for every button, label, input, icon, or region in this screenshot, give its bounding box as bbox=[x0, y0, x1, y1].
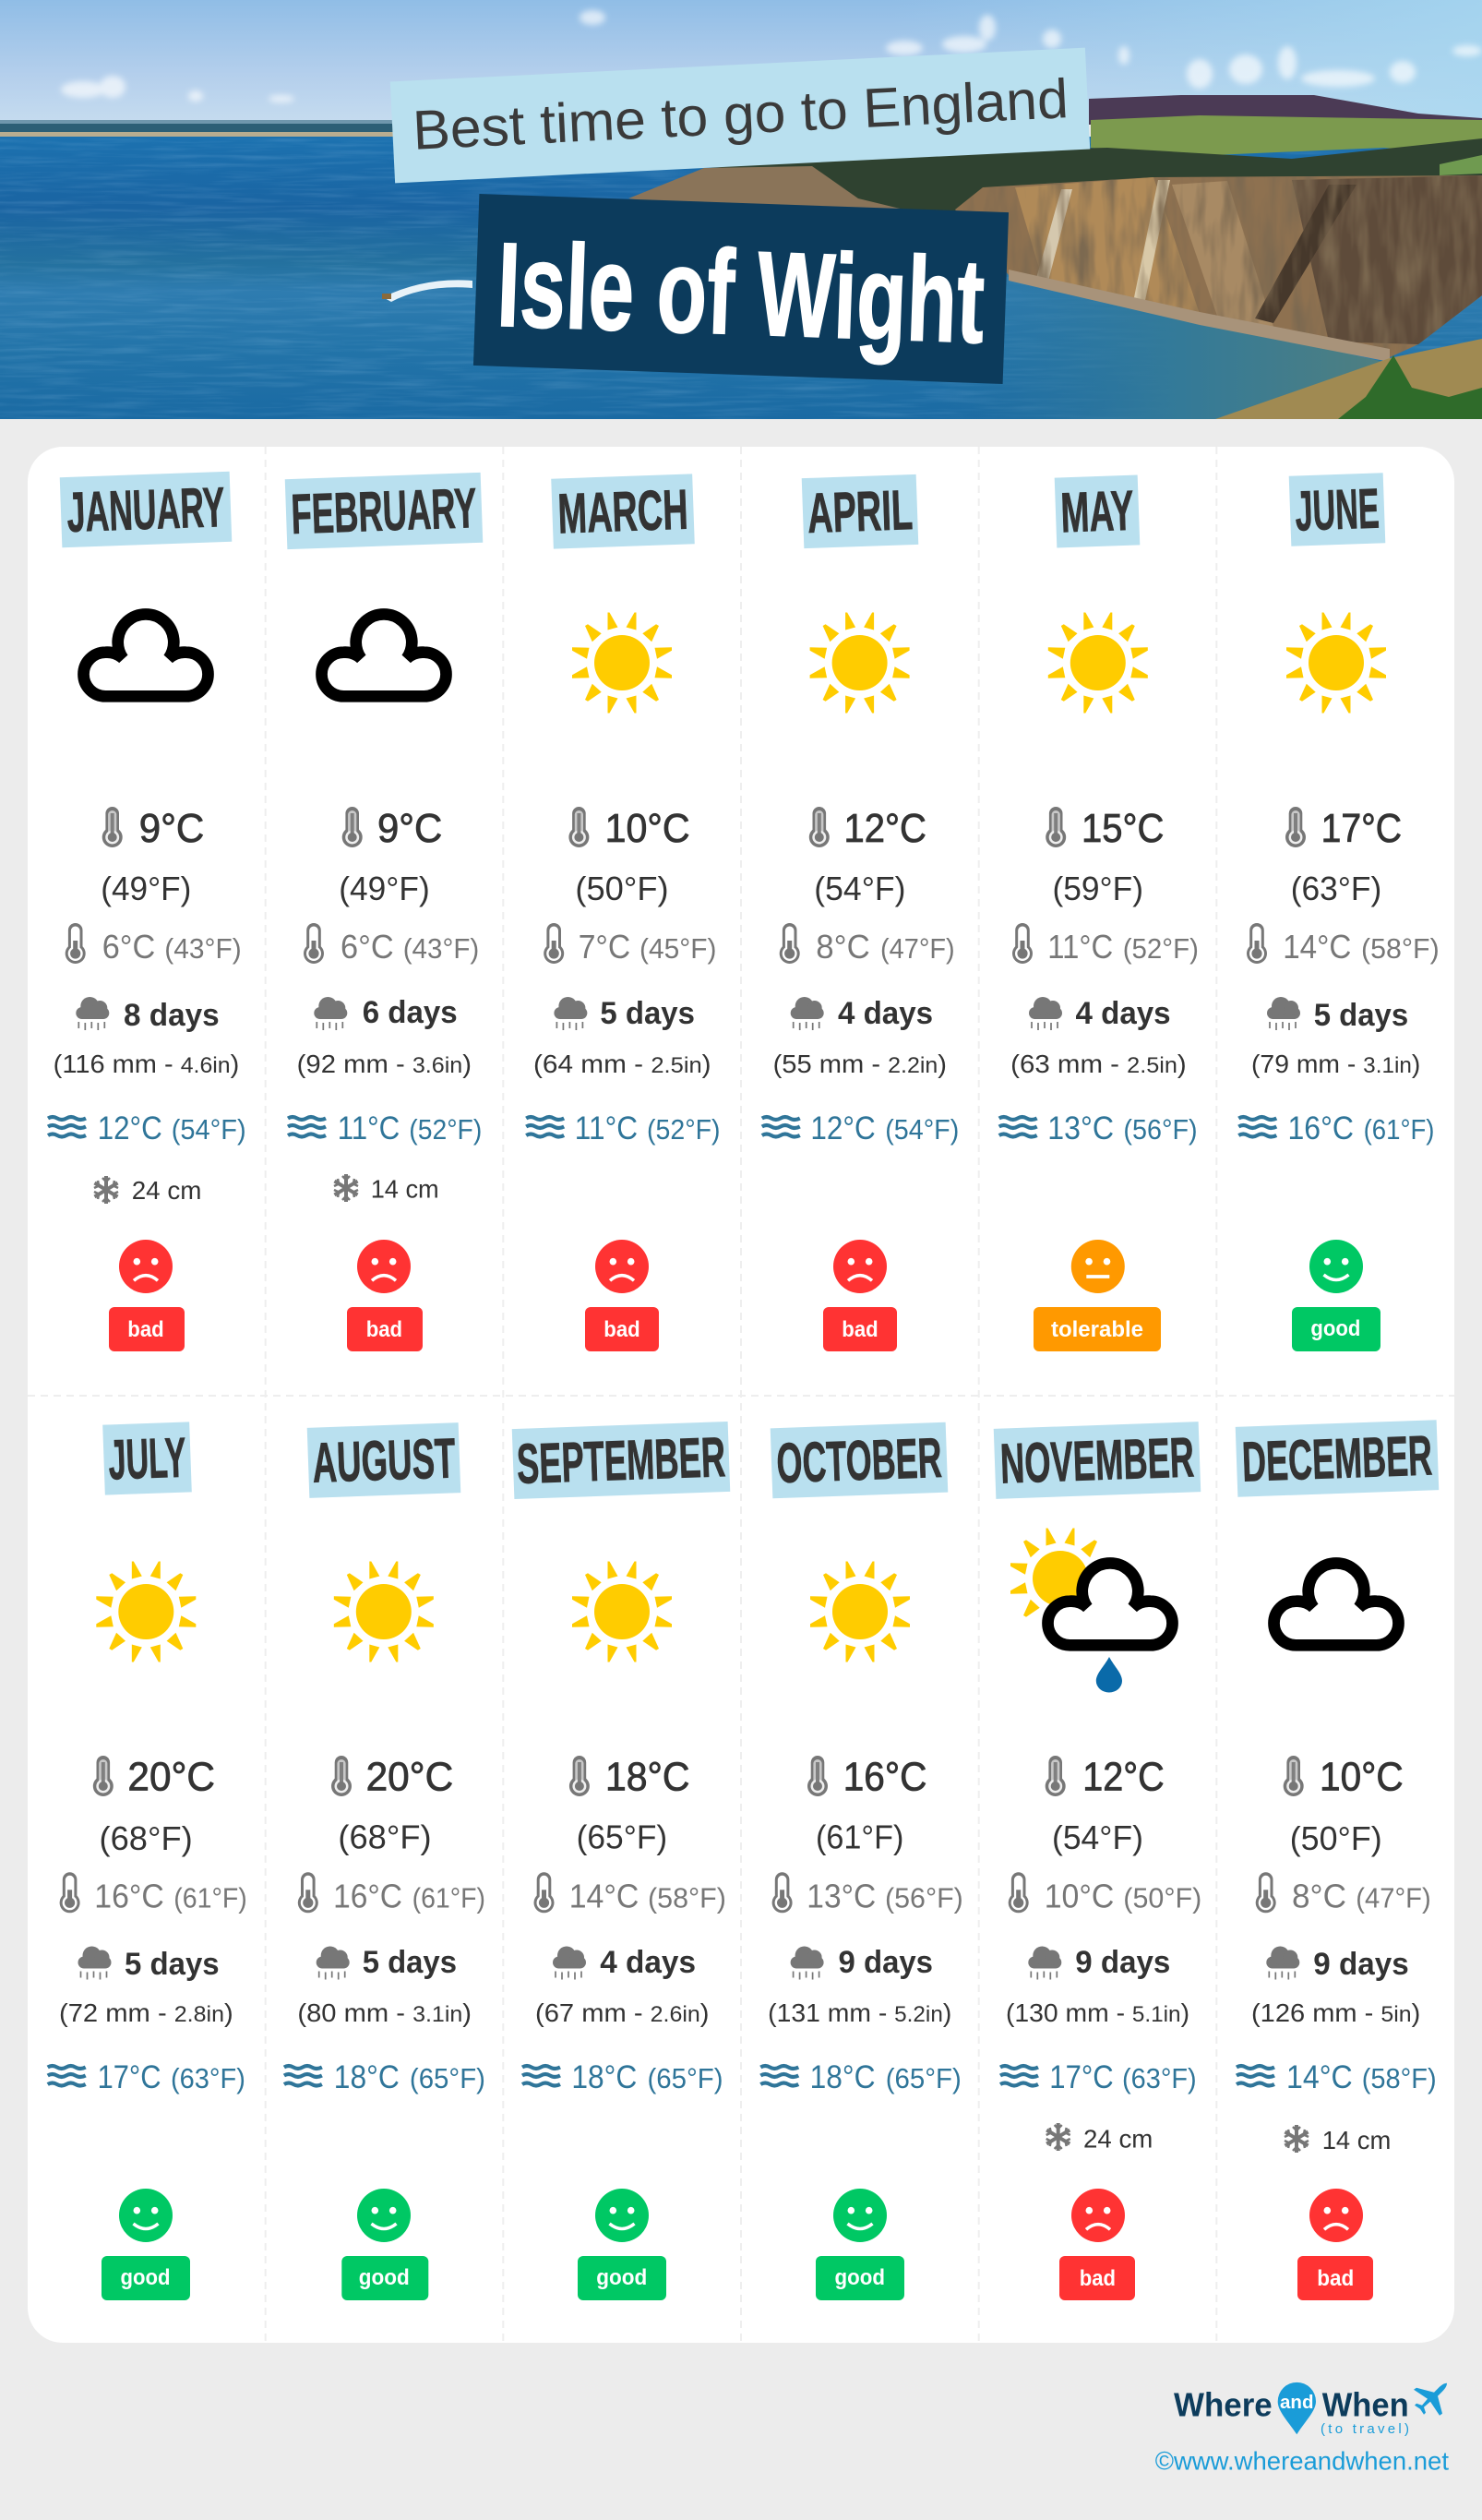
sea temperature: 18°C bbox=[334, 2059, 400, 2095]
sea temperature bbox=[1238, 1110, 1434, 1146]
rainfall bbox=[1251, 997, 1420, 1078]
logo: Where and When bbox=[1174, 2382, 1447, 2437]
sea temperature: (54°F) bbox=[172, 1113, 246, 1146]
low temperature: (58°F) bbox=[1361, 932, 1440, 965]
title: Isle of Wight: Isle of Wight bbox=[495, 217, 986, 368]
month label: February bbox=[285, 473, 483, 549]
rainfall: (130 mm - 5.1in) bbox=[1006, 1998, 1189, 2027]
low temperature: (61°F) bbox=[173, 1881, 247, 1914]
sea temperature: (61°F) bbox=[1364, 1113, 1434, 1146]
month label: September bbox=[512, 1422, 730, 1499]
sea temperature bbox=[522, 2059, 723, 2095]
high temperature: 9°C bbox=[139, 806, 204, 851]
high temperature: (68°F) bbox=[338, 1818, 432, 1855]
credit: website: ©www.whereandwhen.net bbox=[1155, 2447, 1449, 2476]
high temperature bbox=[339, 806, 442, 907]
sea temperature bbox=[526, 1110, 720, 1146]
icon: sun bbox=[572, 613, 672, 713]
sea temperature: (65°F) bbox=[648, 2062, 723, 2094]
rating: good: good bbox=[120, 2265, 170, 2290]
low temperature: (61°F) bbox=[412, 1881, 485, 1914]
month label: May: MAY bbox=[1059, 479, 1135, 544]
rating: good bbox=[102, 2189, 190, 2300]
low temperature: (43°F) bbox=[164, 932, 242, 965]
logo: Where and When: (to travel) bbox=[1321, 2421, 1409, 2437]
low temperature: 16°C bbox=[333, 1878, 402, 1914]
rainfall: 5 days bbox=[125, 1947, 220, 1982]
month label: June: JUNE bbox=[1294, 476, 1380, 543]
rainfall: (80 mm - 3.1in) bbox=[297, 1998, 472, 2027]
high temperature: (49°F) bbox=[101, 870, 191, 907]
sea temperature: (65°F) bbox=[886, 2062, 962, 2094]
rainfall bbox=[1010, 996, 1187, 1078]
low temperature: 13°C bbox=[807, 1878, 876, 1914]
low temperature: 10°C bbox=[1045, 1878, 1114, 1914]
icon: sun bbox=[1286, 613, 1386, 713]
rating: bad bbox=[1059, 2189, 1135, 2300]
icon: cloud bbox=[84, 614, 208, 696]
sea temperature: (52°F) bbox=[647, 1113, 720, 1146]
rating: good bbox=[341, 2189, 428, 2300]
icon: map pin bbox=[1278, 2382, 1316, 2434]
sea temperature bbox=[1237, 2059, 1437, 2095]
low temperature: (45°F) bbox=[639, 932, 716, 965]
low temperature bbox=[780, 923, 955, 966]
panel: January bbox=[48, 472, 246, 1351]
snowfall bbox=[1285, 2125, 1391, 2154]
rating: bad bbox=[823, 1240, 897, 1351]
panel: August bbox=[284, 1422, 485, 2300]
month label: July: JULY bbox=[107, 1426, 187, 1491]
rainfall: (79 mm - 3.1in) bbox=[1251, 1050, 1420, 1078]
rainfall bbox=[54, 997, 239, 1078]
rating: bad bbox=[347, 1240, 423, 1351]
high temperature: (50°F) bbox=[1290, 1819, 1382, 1857]
panel: December bbox=[1236, 1420, 1439, 2300]
sea temperature: (58°F) bbox=[1362, 2062, 1437, 2094]
icon: sun bbox=[96, 1562, 196, 1662]
low temperature: (43°F) bbox=[403, 932, 479, 965]
high temperature: (54°F) bbox=[814, 870, 906, 907]
month label: May bbox=[1055, 474, 1140, 548]
high temperature bbox=[1284, 1754, 1404, 1857]
rating: tolerable: tolerable bbox=[1051, 1317, 1143, 1342]
rainfall: 5 days bbox=[600, 996, 695, 1031]
rainfall: 8 days bbox=[124, 998, 220, 1033]
rainfall: (67 mm - 2.6in) bbox=[535, 1998, 709, 2027]
sea temperature bbox=[284, 2059, 485, 2095]
high temperature: 17°C bbox=[1321, 806, 1402, 851]
low temperature bbox=[544, 923, 716, 966]
rainfall: 6 days bbox=[363, 995, 458, 1030]
high temperature bbox=[1046, 806, 1164, 907]
title: Isle of Wight bbox=[473, 194, 1009, 384]
rating: good: good bbox=[1310, 1316, 1360, 1341]
snowfall: 24 cm bbox=[132, 1176, 201, 1205]
high temperature bbox=[569, 1754, 690, 1855]
low temperature: 6°C bbox=[341, 928, 394, 966]
month label: September: SEPTEMBER bbox=[516, 1425, 726, 1495]
rating: bad: bad bbox=[604, 1317, 640, 1342]
banner: subtitle: Best time to go to England bbox=[412, 67, 1070, 162]
rainfall bbox=[1251, 1946, 1420, 2027]
panel: September bbox=[512, 1422, 730, 2300]
sea temperature: 17°C bbox=[1049, 2059, 1114, 2095]
rainfall: (126 mm - 5in) bbox=[1251, 1998, 1420, 2027]
snowfall: 14 cm bbox=[371, 1174, 439, 1204]
high temperature bbox=[101, 806, 204, 907]
sea temperature bbox=[999, 1110, 1198, 1146]
month label: November: NOVEMBER bbox=[999, 1425, 1195, 1495]
rating: good: good bbox=[834, 2265, 885, 2290]
icon: cloud bbox=[322, 614, 446, 696]
icon: sun, cloud and rain drop bbox=[1010, 1529, 1172, 1692]
high temperature: (50°F) bbox=[575, 870, 669, 907]
low temperature bbox=[304, 923, 479, 966]
snowfall bbox=[334, 1174, 439, 1204]
sea temperature bbox=[762, 1110, 959, 1146]
sea temperature: 13°C bbox=[1047, 1110, 1114, 1146]
sea temperature: (56°F) bbox=[1123, 1113, 1198, 1146]
rating: good: good bbox=[359, 2265, 410, 2290]
high temperature: 12°C bbox=[843, 806, 926, 851]
month label: January: JANUARY bbox=[66, 475, 226, 544]
rating: bad: bad bbox=[1317, 2266, 1354, 2291]
sea temperature bbox=[48, 2059, 245, 2095]
high temperature bbox=[331, 1754, 453, 1855]
rainfall: 9 days bbox=[838, 1945, 933, 1980]
low temperature bbox=[1256, 1872, 1431, 1914]
icon: sun bbox=[810, 1562, 910, 1662]
icon: airplane bbox=[1414, 2383, 1447, 2416]
high temperature: (49°F) bbox=[339, 870, 430, 907]
rainfall bbox=[773, 996, 947, 1078]
month label: January bbox=[60, 472, 232, 547]
panel: May bbox=[999, 474, 1199, 1351]
month label: March: MARCH bbox=[556, 478, 689, 545]
rating: good bbox=[578, 2189, 666, 2300]
low temperature: 16°C bbox=[94, 1878, 164, 1914]
rainfall: 9 days bbox=[1313, 1947, 1409, 1982]
panel: October bbox=[760, 1422, 963, 2300]
high temperature bbox=[568, 806, 690, 907]
rainfall bbox=[533, 996, 711, 1078]
low temperature: (58°F) bbox=[648, 1881, 726, 1914]
snowfall bbox=[94, 1176, 201, 1205]
low temperature: (47°F) bbox=[1356, 1881, 1431, 1914]
month label: April bbox=[802, 474, 918, 548]
logo: Where and When: Where bbox=[1174, 2385, 1273, 2423]
low temperature: 8°C bbox=[816, 928, 870, 966]
icon: sun bbox=[810, 613, 910, 713]
rating: bad bbox=[1297, 2189, 1373, 2300]
low temperature: (47°F) bbox=[880, 932, 955, 965]
low temperature bbox=[60, 1872, 247, 1914]
month label: July bbox=[102, 1422, 192, 1495]
low temperature bbox=[298, 1872, 485, 1914]
high temperature bbox=[93, 1754, 215, 1857]
low temperature: 11°C bbox=[1047, 928, 1113, 966]
snowfall: 14 cm bbox=[1322, 2126, 1391, 2154]
high temperature: (63°F) bbox=[1291, 870, 1381, 907]
rating: bad bbox=[585, 1240, 659, 1351]
month label: March bbox=[551, 474, 695, 549]
sea temperature: 18°C bbox=[571, 2059, 637, 2095]
panel: July bbox=[48, 1422, 247, 2300]
snowfall bbox=[1046, 2123, 1153, 2153]
sea temperature bbox=[760, 2059, 962, 2095]
rating: tolerable bbox=[1034, 1240, 1161, 1351]
high temperature: 16°C bbox=[843, 1754, 926, 1800]
high temperature: (65°F) bbox=[577, 1818, 667, 1855]
sea temperature: (63°F) bbox=[171, 2062, 245, 2094]
month label: June bbox=[1289, 473, 1385, 546]
high temperature: (54°F) bbox=[1052, 1818, 1143, 1856]
rainfall: 5 days bbox=[363, 1945, 457, 1980]
low temperature bbox=[772, 1872, 963, 1914]
sea temperature: 16°C bbox=[1288, 1110, 1354, 1146]
logo: Where and When: When bbox=[1322, 2385, 1409, 2423]
rating: bad: bad bbox=[842, 1317, 878, 1342]
low temperature bbox=[1247, 923, 1440, 966]
snowfall: 24 cm bbox=[1083, 2125, 1153, 2153]
low temperature: (52°F) bbox=[1123, 932, 1199, 965]
panel: monthly climate grid bbox=[28, 447, 1454, 2343]
high temperature bbox=[809, 806, 926, 907]
rainfall bbox=[535, 1945, 709, 2027]
low temperature bbox=[1009, 1872, 1201, 1914]
rainfall bbox=[1006, 1945, 1189, 2027]
high temperature bbox=[1046, 1754, 1165, 1856]
low temperature bbox=[533, 1872, 726, 1914]
rainfall: 4 days bbox=[600, 1945, 696, 1980]
icon: sun bbox=[572, 1562, 672, 1662]
high temperature: 12°C bbox=[1082, 1754, 1165, 1800]
panel: April bbox=[762, 474, 959, 1351]
month label: October bbox=[771, 1422, 948, 1498]
high temperature bbox=[1285, 806, 1402, 907]
rainfall: (55 mm - 2.2in) bbox=[773, 1050, 947, 1078]
rainfall: (131 mm - 5.2in) bbox=[768, 1998, 951, 2027]
rating: bad: bad bbox=[1080, 2266, 1116, 2291]
low temperature: 14°C bbox=[1283, 928, 1351, 966]
low temperature bbox=[66, 923, 242, 966]
high temperature: 20°C bbox=[366, 1754, 453, 1800]
sea temperature bbox=[288, 1110, 482, 1146]
rating: good bbox=[816, 2189, 904, 2300]
sea temperature: (52°F) bbox=[409, 1113, 482, 1146]
sea temperature: 18°C bbox=[810, 2059, 875, 2095]
sea temperature bbox=[48, 1110, 246, 1146]
sea temperature: 14°C bbox=[1286, 2059, 1353, 2095]
high temperature: 20°C bbox=[127, 1754, 215, 1800]
low temperature bbox=[1012, 923, 1199, 966]
high temperature: (61°F) bbox=[816, 1818, 903, 1855]
icon: sun bbox=[1048, 613, 1148, 713]
high temperature: 10°C bbox=[1320, 1754, 1404, 1800]
rainfall: (72 mm - 2.8in) bbox=[59, 1998, 233, 2027]
month label: November bbox=[994, 1422, 1201, 1499]
rainfall bbox=[297, 995, 472, 1078]
rating: bad: bad bbox=[127, 1317, 164, 1342]
panel: February bbox=[285, 473, 483, 1351]
rainfall: (116 mm - 4.6in) bbox=[54, 1050, 239, 1078]
high temperature: 9°C bbox=[377, 806, 442, 851]
sea temperature: 12°C bbox=[98, 1110, 162, 1146]
low temperature: 8°C bbox=[1292, 1878, 1346, 1914]
header photo: coastline with cliffs bbox=[0, 0, 1482, 419]
high temperature: 15°C bbox=[1082, 806, 1164, 851]
rainfall bbox=[768, 1945, 951, 2027]
sea temperature: (65°F) bbox=[410, 2062, 485, 2094]
icon: cloud bbox=[1274, 1563, 1398, 1645]
month label: August: AUGUST bbox=[311, 1426, 457, 1494]
panel: November bbox=[994, 1422, 1201, 2300]
rainfall: (64 mm - 2.5in) bbox=[533, 1050, 711, 1078]
low temperature: (50°F) bbox=[1123, 1881, 1201, 1914]
high temperature: 10°C bbox=[605, 806, 690, 851]
sea temperature: 17°C bbox=[98, 2059, 161, 2095]
rainfall bbox=[59, 1946, 233, 2027]
sea temperature: 11°C bbox=[575, 1110, 638, 1146]
sea temperature bbox=[1000, 2059, 1197, 2095]
month label: April: APRIL bbox=[807, 478, 914, 545]
rainfall: 9 days bbox=[1075, 1945, 1170, 1980]
rainfall: 5 days bbox=[1314, 998, 1408, 1033]
rainfall: (63 mm - 2.5in) bbox=[1010, 1050, 1187, 1078]
month label: February: FEBRUARY bbox=[290, 476, 478, 546]
rating: bad: bad bbox=[366, 1317, 402, 1342]
sea temperature: (63°F) bbox=[1122, 2062, 1197, 2094]
high temperature: (59°F) bbox=[1052, 870, 1143, 907]
sea temperature: 11°C bbox=[338, 1110, 400, 1146]
low temperature: 14°C bbox=[569, 1878, 639, 1914]
sea temperature: (54°F) bbox=[885, 1113, 959, 1146]
panel: March bbox=[526, 474, 720, 1351]
rainfall: 4 days bbox=[838, 996, 933, 1031]
high temperature: (68°F) bbox=[100, 1819, 193, 1857]
high temperature: 18°C bbox=[605, 1754, 690, 1800]
low temperature: 7°C bbox=[579, 928, 630, 966]
rating: good bbox=[1292, 1240, 1380, 1351]
sea temperature: 12°C bbox=[810, 1110, 876, 1146]
rainfall: 4 days bbox=[1076, 996, 1171, 1031]
low temperature: (56°F) bbox=[885, 1881, 963, 1914]
month label: August bbox=[307, 1422, 460, 1498]
high temperature bbox=[807, 1754, 926, 1855]
logo: Where and When: and bbox=[1280, 2393, 1314, 2413]
banner: subtitle bbox=[390, 48, 1090, 183]
rating: bad bbox=[109, 1240, 185, 1351]
low temperature: 6°C bbox=[102, 928, 155, 966]
panel: June bbox=[1238, 473, 1440, 1351]
icon: sun bbox=[334, 1562, 434, 1662]
rainfall bbox=[297, 1945, 472, 2027]
month label: October: OCTOBER bbox=[775, 1426, 943, 1494]
rainfall: (92 mm - 3.6in) bbox=[297, 1050, 472, 1078]
rating: good: good bbox=[596, 2265, 647, 2290]
